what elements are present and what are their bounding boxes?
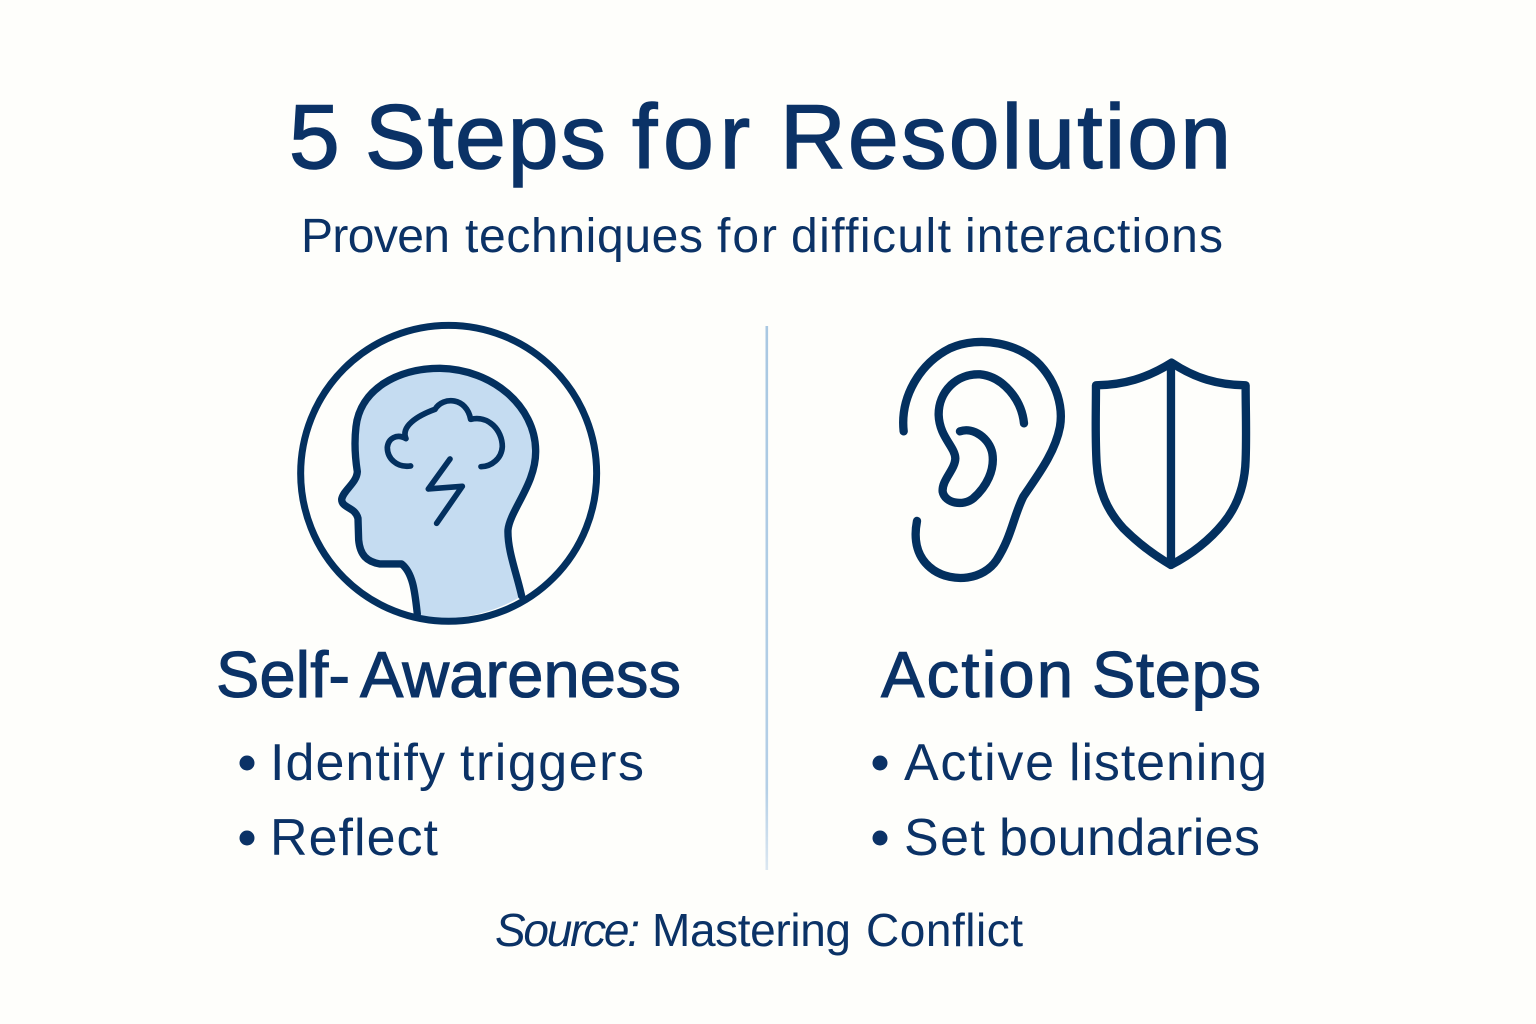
lightning bolt (428, 459, 462, 523)
title (289, 87, 1231, 188)
source: Mastering (652, 904, 851, 956)
source (495, 904, 1023, 956)
head silhouette fill (342, 368, 536, 618)
outer circle (301, 325, 597, 621)
bullet: active listening (872, 734, 1267, 792)
title: 5 (289, 87, 340, 188)
title: Resolution (780, 87, 1231, 188)
bullet: set boundaries (872, 809, 1260, 867)
subtitle: difficult (791, 210, 951, 263)
heading: action steps: Steps (1092, 638, 1261, 711)
icon: ear (903, 342, 1061, 578)
bullet: identify triggers: Identify (270, 734, 445, 792)
head outline (342, 368, 536, 614)
icon: shield (1096, 363, 1246, 565)
storm cloud (387, 401, 502, 467)
bullet: reflect: Reflect (270, 809, 439, 867)
bullet: set boundaries: boundaries (999, 809, 1260, 867)
subtitle: Proven (301, 210, 450, 263)
icon: head in circle with storm cloud (301, 325, 597, 621)
subtitle: techniques (465, 210, 703, 263)
panel: action steps (872, 342, 1267, 867)
title: for (632, 87, 750, 188)
subtitle (301, 210, 1223, 263)
bullet: identify triggers: triggers (460, 734, 644, 792)
source: Source: (495, 904, 640, 956)
source: Conflict (866, 904, 1023, 956)
heading: self-awareness: Self- (216, 638, 350, 711)
bullet: active listening: Active (904, 734, 1054, 792)
heading: action steps: Action (881, 638, 1073, 711)
heading: self-awareness (216, 638, 681, 711)
bullet: set boundaries: Set (904, 809, 986, 867)
bullet: active listening: listening (1069, 734, 1267, 792)
subtitle: for (717, 210, 777, 263)
heading: action steps (881, 638, 1261, 711)
bullet: identify triggers (240, 734, 644, 792)
heading: self-awareness: Awareness (360, 638, 681, 711)
title: Steps (365, 87, 606, 188)
subtitle: interactions (965, 210, 1223, 263)
divider (766, 326, 768, 870)
panel: self-awareness (216, 325, 681, 867)
